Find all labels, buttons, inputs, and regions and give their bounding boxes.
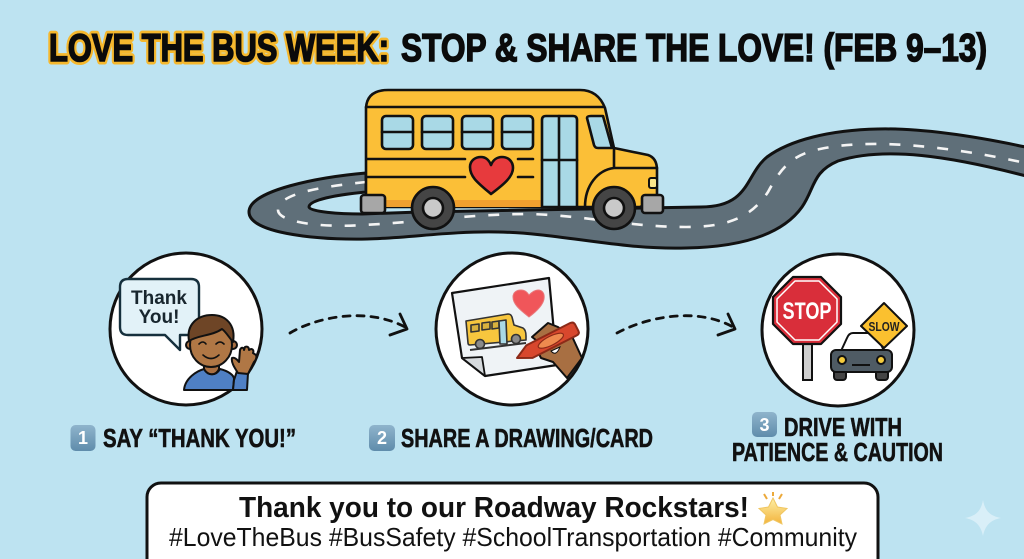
step 1 label xyxy=(70,423,296,453)
face xyxy=(190,323,232,367)
facial features xyxy=(199,342,224,358)
school bus xyxy=(361,90,663,229)
panel box xyxy=(147,483,878,559)
person xyxy=(184,315,256,390)
step 2 circle: drawing card xyxy=(436,253,588,405)
car wheels xyxy=(834,368,846,380)
step 3 circle: drive with caution xyxy=(762,254,914,406)
bottom thank-you panel xyxy=(147,483,878,559)
headlight xyxy=(649,178,657,188)
waving hand xyxy=(232,347,256,374)
icon: glowing star xyxy=(759,492,787,524)
rear wheel xyxy=(412,187,454,229)
headlights xyxy=(838,356,846,364)
windows xyxy=(382,116,533,149)
shirt xyxy=(184,369,234,390)
badge 3: 3 xyxy=(759,415,770,435)
badge 2 xyxy=(369,425,395,451)
title highlight inner weight: LOVE THE BUS WEEK: xyxy=(49,27,389,70)
hand fingers xyxy=(532,323,566,347)
hair xyxy=(189,315,234,342)
hood and fender lines xyxy=(585,148,657,207)
step 3 label xyxy=(732,412,943,467)
side stripes xyxy=(367,159,533,177)
crayon xyxy=(514,321,580,364)
stop text: STOP xyxy=(782,298,832,325)
ears xyxy=(186,341,194,349)
roof line xyxy=(366,106,603,108)
speech bubble xyxy=(120,279,199,350)
bus body xyxy=(366,90,657,207)
door xyxy=(542,116,577,207)
title highlight: love the bus week: LOVE THE BUS WEEK: xyxy=(49,27,389,70)
speech text: Thank xyxy=(131,288,187,309)
slow sign xyxy=(861,303,907,348)
car roof xyxy=(841,333,884,351)
paper card xyxy=(452,278,557,376)
circle xyxy=(110,253,262,405)
arrow: step 1 to step 2 xyxy=(290,314,407,335)
circle xyxy=(762,254,914,406)
winding road xyxy=(249,129,1024,248)
badge 1: 1 xyxy=(78,428,88,448)
title xyxy=(49,27,987,70)
road surface xyxy=(249,129,1024,248)
step 2 label xyxy=(369,423,653,453)
lower orange band xyxy=(368,200,542,207)
drawn heart xyxy=(513,290,544,317)
licence plate xyxy=(852,364,870,366)
sparkle watermark xyxy=(965,500,1001,536)
label text 1: SAY “THANK YOU!” xyxy=(103,423,296,453)
front wheel xyxy=(593,187,635,229)
neck xyxy=(204,362,219,374)
badge 3 xyxy=(752,412,777,437)
stop sign xyxy=(773,277,841,344)
badge 2: 2 xyxy=(377,428,387,448)
sleeve xyxy=(233,371,248,390)
car body xyxy=(831,350,892,372)
windshield xyxy=(587,116,612,148)
label text 3 line 2: PATIENCE & CAUTION xyxy=(732,437,943,467)
hand palm xyxy=(537,332,582,378)
paper fold xyxy=(462,357,485,376)
circle xyxy=(436,253,588,405)
panel heading: Thank you to our Roadway Rockstars! xyxy=(239,492,749,524)
road centre dashes xyxy=(278,144,1024,227)
mini bus drawing xyxy=(466,314,526,350)
label text 2: SHARE A DRAWING/CARD xyxy=(401,423,653,453)
hashtags: #LoveTheBus #BusSafety #SchoolTransportation #Community xyxy=(169,522,857,552)
speech text: You! xyxy=(139,307,179,328)
slow text: SLOW xyxy=(868,320,900,334)
step 1 circle: thank you xyxy=(110,253,262,405)
badge 1 xyxy=(70,425,96,451)
heart xyxy=(470,157,513,194)
car xyxy=(831,333,892,380)
front bumper xyxy=(642,195,663,213)
arrow: step 2 to step 3 xyxy=(617,314,735,335)
rear bumper xyxy=(361,195,385,213)
sign pole xyxy=(803,344,812,380)
thumb gap xyxy=(551,347,560,353)
label text 3 line 1: DRIVE WITH xyxy=(784,412,902,442)
